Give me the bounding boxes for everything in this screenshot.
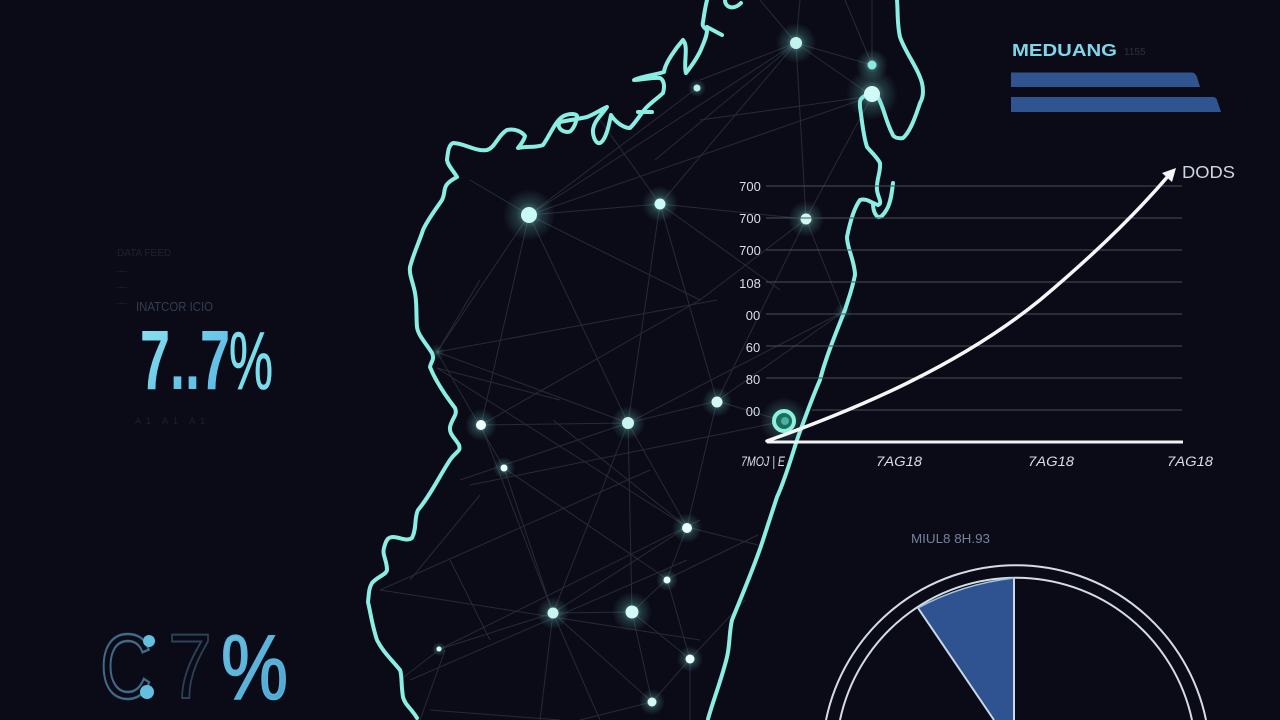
chart x-axis labels xyxy=(741,454,1214,469)
legend bar 1 xyxy=(1011,72,1200,87)
node xyxy=(788,201,824,237)
faint header lines: — xyxy=(117,266,127,277)
node xyxy=(672,513,702,543)
stat value xyxy=(140,313,273,407)
map outline xyxy=(368,0,923,719)
faint header lines: DATA FEED xyxy=(117,248,171,259)
stat label: INATCOR ICIO xyxy=(136,299,213,314)
chart x-axis labels: 7AG18 xyxy=(876,454,923,469)
ghost digit: 7 xyxy=(168,616,212,718)
stat percent sign: % xyxy=(229,316,273,407)
node xyxy=(688,79,706,97)
line chart xyxy=(739,162,1235,469)
node xyxy=(465,409,497,441)
node xyxy=(493,457,515,479)
legend bar 2 xyxy=(1011,97,1221,112)
chart y-axis labels: 00 xyxy=(746,308,760,323)
stat digits: 7..7 xyxy=(140,313,230,407)
trend curve with arrow xyxy=(767,168,1176,441)
chart x-axis labels: 7AG18 xyxy=(1028,454,1075,469)
legend faint value: 1155 xyxy=(1124,47,1146,58)
pie outer ring xyxy=(826,565,1206,720)
chart y-axis labels: 700 xyxy=(739,179,761,194)
north coast offshoot xyxy=(638,1,741,112)
pie inner ring xyxy=(840,578,1192,720)
node xyxy=(776,23,816,63)
chart x-axis labels: 7MOJ | E xyxy=(741,454,786,469)
faint header lines xyxy=(117,248,171,309)
node xyxy=(612,592,652,632)
node xyxy=(429,344,445,360)
node xyxy=(537,597,569,629)
pie chart xyxy=(826,531,1206,720)
node xyxy=(503,189,555,241)
chart y-axis labels: 60 xyxy=(746,340,760,355)
west and north coast xyxy=(368,0,707,718)
node xyxy=(702,387,732,417)
stat: bottom left xyxy=(100,616,288,719)
ghost letter: C xyxy=(100,616,152,718)
node xyxy=(834,303,852,321)
pie highlighted slice xyxy=(918,578,1014,720)
node xyxy=(642,186,678,222)
node xyxy=(639,689,665,715)
node xyxy=(656,569,678,591)
network nodes xyxy=(429,23,898,715)
faint footnote: A1 A1 A1 xyxy=(135,416,205,426)
stat: top left xyxy=(117,248,273,426)
chart grid lines xyxy=(766,186,1182,410)
node xyxy=(856,49,888,81)
chart y-axis labels xyxy=(739,179,761,419)
node xyxy=(677,646,703,672)
chart x-axis labels: 7AG18 xyxy=(1167,454,1214,469)
chart y-axis labels: 80 xyxy=(746,372,760,387)
node xyxy=(846,68,898,120)
chart y-axis labels: 700 xyxy=(739,243,761,258)
network connection lines xyxy=(380,0,872,720)
pie title: MIUL8 8H.93 xyxy=(911,531,990,546)
faint header lines: — xyxy=(117,282,127,293)
faint header lines: — xyxy=(117,298,127,309)
east coast xyxy=(708,0,923,719)
node on chart origin xyxy=(760,397,808,445)
chart y-axis labels: 108 xyxy=(739,276,761,291)
chart y-axis labels: 700 xyxy=(739,211,761,226)
pie slice edges xyxy=(918,578,1014,720)
value dots xyxy=(140,635,155,699)
chart x axis xyxy=(767,440,1183,444)
chart series label: DODS xyxy=(1182,162,1235,182)
stat percent: % xyxy=(221,617,288,719)
east coast hook xyxy=(873,183,893,217)
legend top right xyxy=(1011,40,1221,112)
chart y-axis labels: 00 xyxy=(746,404,760,419)
node xyxy=(611,406,645,440)
node xyxy=(432,642,446,656)
legend title: MEDUANG xyxy=(1012,40,1117,60)
